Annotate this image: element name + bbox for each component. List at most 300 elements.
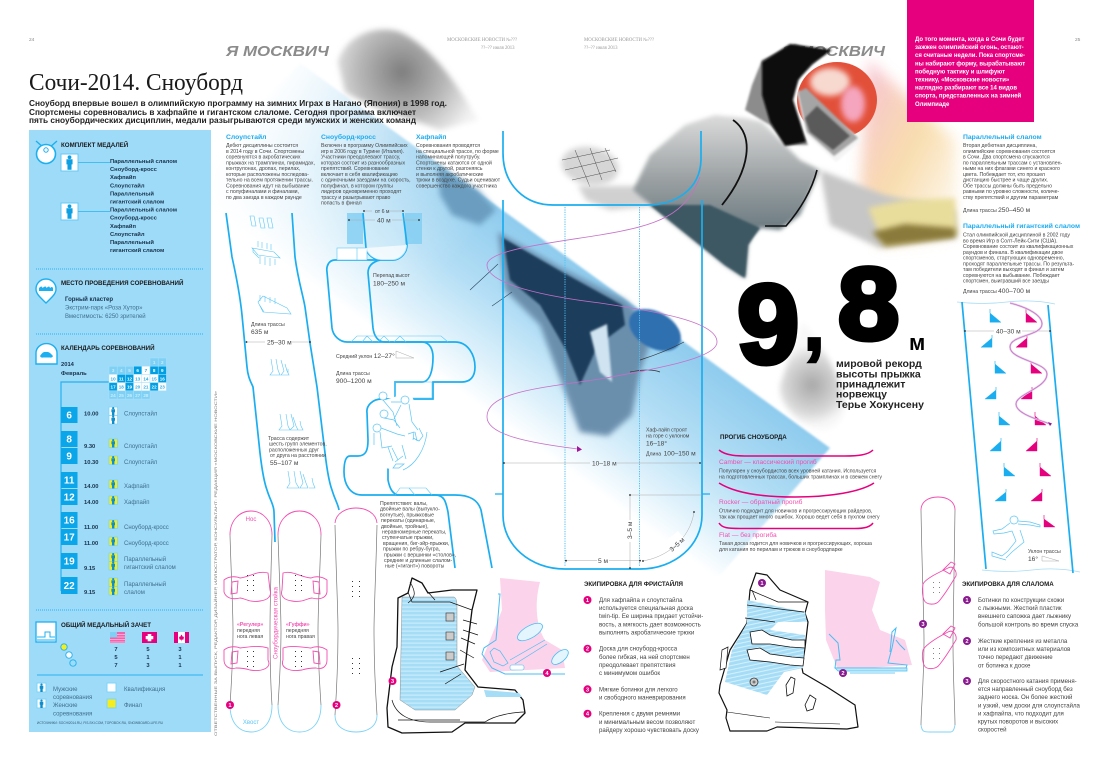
- section header right: Я МОСКВИЧ: [781, 43, 885, 60]
- medal counts: 5: [146, 647, 150, 653]
- text: halfpipe: Соревнования проводятся: [416, 143, 480, 149]
- schedule disciplines: Параллельный: [124, 581, 166, 588]
- slalom item 1: с лыжными. Жесткий пластик: [978, 605, 1062, 612]
- schedule dates: 6: [66, 410, 72, 422]
- curve: flat: [719, 523, 873, 528]
- obstacles note: средние и длинные слалом-: [384, 558, 452, 564]
- legend: Женские: [53, 703, 78, 709]
- panel: pink intro: спорта, представленных на зимней: [915, 93, 1022, 100]
- halfpipe width: 10–18 м: [592, 460, 617, 468]
- text: parallel giant slalom: там победители выходят в финал и затем: [963, 267, 1065, 273]
- course slope: Уклон трассы: [1028, 549, 1061, 555]
- panel: pink intro: ны набирают форму, вырабатывают: [915, 60, 1025, 67]
- markers: freestyle items: 2: [335, 703, 338, 709]
- slalom item 3: и хафпайпа, что подходит для: [978, 710, 1064, 717]
- text: snowboard cross: полуфинал, в котором группы: [321, 183, 393, 189]
- year and month: 2014: [61, 362, 75, 368]
- text: slopestyle: Дебют дисциплины состоится: [226, 143, 298, 149]
- item 2: более гибкая, на ней спортсмен: [599, 654, 690, 661]
- markers: slalom items: [758, 579, 927, 677]
- gate width: от 6 м: [375, 209, 390, 215]
- text: parallel giant slalom: раундов и финала. В квалификации двое: [963, 250, 1063, 256]
- obstacles note: ные («гигант») повороты: [385, 564, 445, 570]
- obstacles note: двойные валы (выпукло-: [380, 506, 440, 513]
- text: parallel giant slalom: во время Игр в Солт-Лейк-Сити (США).: [963, 237, 1058, 244]
- slalom item 1: [963, 596, 1079, 628]
- item 3: Мягкие ботинки для легкого: [599, 686, 678, 693]
- panel: pink intro: победную тактику и шлифуют: [915, 68, 1005, 75]
- medal markers: [61, 644, 76, 666]
- schedule disciplines: гигантский слалом: [124, 564, 176, 571]
- text: parallel slalom: дистанцию быстрее и чаще других.: [963, 178, 1048, 184]
- medal events list: Параллельный слалом: [110, 207, 177, 214]
- text: snowboard cross: препятствий. Соревнование: [321, 165, 389, 172]
- item 2: 2: [586, 647, 589, 653]
- panel: pink intro: технику, «Московские новости»: [915, 78, 1010, 84]
- camber text: [719, 458, 882, 480]
- slalom item 1: большой контроль во время спуска: [978, 621, 1079, 628]
- legend: Мужские: [53, 687, 78, 693]
- slalom rider: [992, 516, 1040, 560]
- panel: pink intro: До того момента, когда в Сочи будет: [915, 36, 1025, 43]
- slopestyle length: Длина трассы: [251, 322, 285, 328]
- schedule disciplines: Сноуборд-кросс: [124, 541, 169, 547]
- calendar numbers: 2: [161, 360, 164, 365]
- flag: Switzerland: [142, 632, 157, 643]
- text: snowboard cross: Участники преодолевают трассу,: [321, 154, 400, 160]
- icon: women: [61, 203, 110, 220]
- text: parallel slalom: олимпийские соревнования состоятся: [963, 148, 1055, 155]
- schedule disciplines: Параллельный: [124, 556, 166, 563]
- slopestyle note: от друга на расстоянии: [270, 453, 326, 459]
- goggles strap: [797, 90, 862, 162]
- calendar numbers: 27: [135, 393, 141, 398]
- legend: Финал: [124, 703, 143, 709]
- panel: slalom equipment: [962, 581, 1081, 734]
- chart: slalom course: [957, 301, 1080, 573]
- schedule times: 11.00: [84, 525, 98, 531]
- item 4: [584, 710, 700, 734]
- pink gates: [1016, 309, 1055, 527]
- text: slopestyle: по два заезда в каждом раунде: [226, 195, 302, 201]
- rocker text: Отлично подходит для новичков и прогрессирующих райдеров,: [719, 508, 872, 514]
- nose label: Нос: [246, 517, 256, 523]
- heading: camber: ПРОГИБ СНОУБОРДА: [720, 434, 787, 441]
- halfpipe note: Хаф-пайп строят: [646, 426, 688, 434]
- slalom item 2: от ботинка к доске: [978, 662, 1031, 669]
- text: slopestyle: тельно на всем протяжении трассы.: [226, 178, 313, 184]
- elevation drop: 180–250 м: [373, 280, 406, 288]
- medal counts: [114, 647, 182, 669]
- slalom item 1: внешнего сапожка дает лыжнику: [978, 613, 1072, 620]
- helmet: [797, 62, 877, 138]
- medal events list: Параллельный: [110, 239, 154, 246]
- section header left: Я МОСКВИЧ: [225, 43, 329, 60]
- goofy stance: передняя: [286, 628, 309, 634]
- slalom route: [1010, 303, 1052, 426]
- camber text: Популярен у сноубордистов всех уровней катания. Используется: [719, 468, 876, 474]
- markers: freestyle items: 4: [545, 671, 549, 677]
- text: snowboard cross: включает в себя квалификацию: [321, 172, 398, 178]
- obstacles note: вращения, биг-эйр-прыжки,: [383, 540, 449, 547]
- legend: соревнования: [53, 712, 92, 718]
- sources: ИСТОЧНИКИ: SOCHI2014.RU, FIS-SKI.COM, TOPOBOX.RU, SNOWBOARD-LIFE.RU: [37, 721, 164, 725]
- obstacles note: Препятствия: валы,: [380, 501, 428, 507]
- halfpipe note: 16–18°: [646, 440, 667, 448]
- schedule times: 9.30: [84, 444, 95, 450]
- torso: [633, 115, 820, 278]
- venue details: Вместимость: 6250 зрителей: [65, 313, 146, 320]
- text: parallel giant slalom: Соревнование состоит из квалификационных: [963, 244, 1074, 250]
- calendar numbers: 25: [119, 393, 124, 398]
- schedule times: 9.15: [84, 566, 96, 572]
- flat text: для катания по перилам и трюков в сноубордпарке: [719, 547, 843, 553]
- obstacles note: ступенчатые прыжки,: [382, 535, 434, 541]
- panel: pink intro: наглядно разбирают все 14 видов: [915, 85, 1017, 92]
- calendar numbers: 20: [135, 385, 141, 390]
- text: snowboard cross: Сноуборд-кросс: [321, 133, 376, 141]
- route curve: [487, 177, 717, 449]
- item 4: и минимальным весом позволяют: [599, 719, 695, 726]
- panel: pink intro: ся считаные недели. Пока спортсме-: [915, 53, 1025, 59]
- medal events list: Слоупстайл: [110, 182, 145, 189]
- goofy stance: нога правая: [286, 634, 315, 640]
- icon: medal: [36, 141, 57, 164]
- text: slopestyle: Соревнования идут на выбывание: [226, 183, 310, 189]
- leg: [498, 232, 655, 436]
- panel: pink intro: зажжен олимпийский огонь, остают-: [915, 44, 1024, 51]
- calendar numbers: 6: [136, 368, 139, 373]
- text: halfpipe: на специальной трассе, по форме: [416, 148, 499, 155]
- calendar numbers: 24: [111, 393, 116, 398]
- rocker text: так как прощает много ошибок. Хорошо ведет себя в пухлом снегу: [719, 514, 880, 520]
- item 1: 1: [586, 598, 590, 604]
- binding: slalom: [825, 570, 912, 673]
- slalom item 3: Для скоростного катания применя-: [978, 678, 1077, 685]
- binding dots: [247, 575, 360, 674]
- boot: soft freestyle: [387, 578, 525, 733]
- schedule dates: [64, 410, 75, 592]
- schedule disciplines: Хафпайп: [124, 483, 149, 490]
- record caption: норвежцу: [836, 388, 887, 400]
- tail label: Хвост: [243, 720, 259, 726]
- slalom item 2: Жесткие крепления из металла: [978, 638, 1068, 645]
- medal events list: Хафпайп: [110, 174, 136, 181]
- slopestyle width: [246, 340, 311, 346]
- markers: slalom items: 1: [760, 581, 764, 587]
- big number: 8: [838, 248, 899, 361]
- chart: snowboard cross course: [327, 209, 492, 570]
- slopestyle note: 55–107 м: [270, 460, 299, 467]
- heading: calendar: КАЛЕНДАРЬ СОРЕВНОВАНИЙ: [61, 344, 155, 352]
- calendar numbers: 11: [119, 376, 124, 381]
- item 1: Для хафпайпа и слоупстайла: [599, 597, 683, 604]
- calendar numbers: 15: [152, 376, 157, 381]
- flat text: [719, 531, 872, 553]
- record caption: высоты прыжка: [836, 368, 921, 380]
- calendar numbers: 14: [143, 376, 149, 381]
- calendar numbers: 22: [152, 385, 157, 390]
- rocker text: Rocker — обратный прогиб: [719, 498, 803, 506]
- text: snowboard cross: лидеров одновременно проходят: [321, 189, 402, 195]
- obstacles note: двойные, тройные),: [381, 523, 429, 530]
- text: halfpipe: напоминающей полутрубу.: [416, 154, 480, 160]
- text: slopestyle: которые расположены последова-: [226, 172, 309, 178]
- illustration: snowboarder watercolor: [140, 10, 958, 610]
- flat text: Flat — без прогиба: [719, 531, 777, 539]
- regular stance: нога левая: [237, 634, 263, 640]
- slalom item 1: Ботинки по конструкции схожи: [978, 597, 1064, 604]
- item 1: вость, а мягкость дает возможность: [599, 621, 701, 628]
- subtitle: [29, 98, 447, 125]
- schedule dates: 19: [64, 556, 75, 568]
- text: parallel slalom: в Сочи. Два спортсмена спускаются: [963, 154, 1050, 160]
- schedule dates: 9: [66, 452, 72, 462]
- panel: freestyle equipment: [584, 580, 703, 734]
- text: parallel slalom: ными на них флагами синего и красного: [963, 166, 1060, 172]
- curve: camber: [719, 450, 873, 456]
- text: parallel slalom: по параллельным трассам с установлен-: [963, 160, 1062, 166]
- text: parallel giant slalom: [963, 222, 1080, 295]
- markers: freestyle items: 1: [228, 703, 232, 709]
- flat text: Такая доска годится для новичков и прогрессирующих, хороша: [719, 541, 872, 547]
- panel: pink intro: [907, 0, 1034, 122]
- legend: Квалификация: [124, 687, 165, 693]
- schedule disciplines: Хафпайп: [124, 499, 149, 506]
- text: parallel slalom: ству препятствий и другим параметрам: [963, 194, 1059, 201]
- slalom item 3: заднего носка. Он более жесткий: [978, 694, 1072, 701]
- obstacles note: вогнутые), прыжковые: [380, 512, 434, 518]
- text: parallel giant slalom: Параллельный гигантский слалом: [963, 222, 1080, 230]
- medal counts: 3: [146, 663, 150, 669]
- item 3: [584, 685, 686, 701]
- schedule times: 14.00: [84, 500, 99, 506]
- schedule disciplines: Сноуборд-кросс: [124, 525, 169, 531]
- text: parallel slalom: Вторая дебютная дисциплина,: [963, 143, 1037, 149]
- masthead right: МОСКОВСКИЕ НОВОСТИ №???: [584, 37, 654, 43]
- calendar numbers: 7: [145, 368, 148, 373]
- bowl fill: [366, 245, 407, 260]
- medal counts: 7: [114, 647, 118, 653]
- text: slopestyle: прыжках на трамплинах, пирамидах,: [226, 160, 315, 166]
- flat bottom width: [565, 558, 641, 565]
- slalom item 1: 1: [965, 598, 969, 604]
- schedule person glyphs: [111, 407, 115, 595]
- text: slopestyle: [226, 133, 315, 201]
- schedule times: 10.30: [84, 460, 99, 466]
- heading: standings: ОБЩИЙ МЕДАЛЬНЫЙ ЗАЧЕТ: [61, 621, 151, 629]
- course slope: 16°: [1028, 555, 1038, 563]
- heading: venue: МЕСТО ПРОВЕДЕНИЯ СОРЕВНОВАНИЙ: [61, 279, 184, 287]
- wall height: 3–5 м: [669, 536, 687, 553]
- text: parallel slalom: Параллельный слалом: [963, 133, 1042, 141]
- slalom item 3: 3: [965, 679, 969, 685]
- calendar numbers: 17: [111, 385, 116, 390]
- medal events list: Сноуборд-кросс: [110, 215, 158, 222]
- rails and kickers: [250, 216, 315, 488]
- text: parallel giant slalom: Стал олимпийской дисциплиной в 2002 году: [963, 232, 1070, 238]
- regular stance: передняя: [237, 628, 260, 634]
- text: snowboard cross: игр в 2006 году в Турине (Италия).: [321, 149, 404, 155]
- item 1: выполнять акробатические трюки: [599, 629, 694, 636]
- blue gates: [981, 309, 1015, 501]
- legend: соревнования: [53, 695, 92, 701]
- panel: board camber: [719, 434, 882, 553]
- text: slopestyle: соревнуются в акробатических: [226, 154, 301, 160]
- markers: freestyle items: 3: [391, 679, 395, 685]
- schedule day boxes: [61, 407, 78, 594]
- course width: 40–30 м: [996, 328, 1021, 335]
- item 1: [584, 596, 703, 636]
- page number left: 24: [29, 37, 35, 43]
- medal events list: Сноуборд-кросс: [110, 166, 158, 173]
- vertical credits: ОТВЕТСТВЕННЫЕ ЗА ВЫПУСК, РЕДАКТОР, ДИЗАЙНЕР, ИЛЛЮСТРАТОР, КОНСУЛЬТАНТ: РЕДАКЦИЯ «МОСКОВСКИЕ НОВОСТИ»: [214, 391, 218, 736]
- slalom item 2: или из композитных материалов: [978, 646, 1070, 653]
- snowboard nose: [338, 30, 478, 130]
- text: slopestyle: Слоупстайл: [226, 133, 266, 141]
- masthead right: ??–?? июля 2013: [584, 46, 618, 51]
- text: halfpipe: и выполняя акробатические: [416, 172, 484, 178]
- timeline line: [61, 382, 109, 591]
- text: halfpipe: стенки к другой, разгоняясь: [416, 165, 483, 172]
- cross length: 900–1200 м: [336, 378, 372, 385]
- elevation drop: Перепад высот: [373, 273, 410, 279]
- item 2: с минимумом ошибок: [599, 670, 660, 677]
- schedule disciplines: слалом: [124, 590, 145, 596]
- icon: medal standings: [36, 622, 56, 642]
- flag: Canada: [174, 632, 189, 643]
- obstacles note: прыжки по ребру-бугра,: [383, 547, 440, 553]
- binding: freestyle: [482, 578, 571, 674]
- slalom item 3: ется направленный сноуборд без: [978, 686, 1073, 693]
- big number: ,: [803, 278, 825, 367]
- item 1: twin-tip. Ее ширина придает устойчи-: [599, 613, 703, 620]
- text: snowboard cross: которая состоит из разнообразных: [321, 160, 405, 166]
- text: halfpipe: Хафпайп: [416, 133, 446, 141]
- snowboarders group: [372, 392, 428, 472]
- flat bottom width: 5 м: [598, 558, 608, 565]
- boards: regular, goofy, cross: [224, 508, 377, 732]
- schedule times: 11.00: [84, 541, 98, 547]
- item 3: 3: [586, 687, 590, 693]
- calendar numbers: 8: [153, 368, 156, 373]
- text: snowboard cross: [321, 133, 411, 206]
- medal events list: Параллельный слалом: [110, 158, 177, 165]
- average slope: Средний уклон 12–27°: [336, 352, 395, 360]
- schedule disciplines: [124, 410, 176, 596]
- text: snowboard cross: попасть в финал: [321, 200, 362, 206]
- heading: slalom equipment: ЭКИПИРОВКА ДЛЯ СЛАЛОМА: [962, 581, 1054, 588]
- camber text: на подготовленных трассах, больших трамплинах и в свежем снегу: [719, 474, 882, 480]
- medal events list: гигантский слалом: [110, 247, 164, 254]
- item 1: используется специальная доска: [599, 605, 694, 612]
- calendar numbers: 19: [127, 385, 132, 390]
- item 4: 4: [586, 712, 590, 718]
- schedule gender markers: [109, 407, 118, 595]
- text: parallel giant slalom: соревнуются на выбывание. Побеждает: [963, 273, 1060, 279]
- cross length: Длина трассы: [336, 371, 370, 377]
- calendar numbers: 18: [119, 385, 124, 390]
- text: parallel slalom: Обе трассы должны быть предельно: [963, 183, 1052, 189]
- boot of rider: [622, 300, 688, 360]
- text: halfpipe: [416, 133, 501, 189]
- schedule times: 14.00: [84, 484, 99, 490]
- gate width: [348, 209, 420, 224]
- feathered sleeve: [438, 166, 496, 225]
- gate width: 40 м: [377, 218, 391, 224]
- text: parallel giant slalom: спортсменов, стартующих одновременно,: [963, 256, 1064, 262]
- markers: freestyle items: [226, 669, 551, 709]
- slopestyle note: Трасса содержит: [268, 436, 310, 442]
- slopestyle length: 635 м: [251, 329, 269, 336]
- flag: USA: [110, 632, 125, 643]
- text: snowboard cross: трассу и разыгрывают право: [321, 195, 390, 201]
- year and month: Февраль: [61, 371, 87, 377]
- medal events list: гигантский слалом: [110, 198, 164, 206]
- calendar numbers: 12: [127, 376, 132, 381]
- medal events list: Слоупстайл: [110, 231, 145, 238]
- text: slopestyle: контрулонах, дропах, перилах,: [226, 166, 300, 172]
- panel: pink intro: Олимпиаде: [915, 102, 950, 108]
- calendar grid: [109, 358, 166, 399]
- slalom item 2: точно передают движение: [978, 654, 1053, 661]
- schedule disciplines: Слоупстайл: [124, 443, 158, 450]
- rocker text: [719, 498, 880, 520]
- icon: calendar: [36, 344, 57, 364]
- regular stance: «Регулер»: [237, 622, 263, 628]
- slalom item 3: крутых поворотов и высоких: [978, 718, 1058, 726]
- text: halfpipe: совершенство каждого участника: [416, 183, 497, 189]
- calendar numbers: 23: [160, 385, 165, 390]
- item 4: райдеру хорошо чувствовать доску: [599, 727, 700, 734]
- slalom item 3: [963, 677, 1081, 734]
- calendar numbers: 28: [143, 393, 149, 398]
- calendar numbers: 13: [135, 376, 141, 381]
- item 2: преодолевает препятствия: [599, 662, 676, 669]
- text: parallel slalom: равными по уровню сложности, количе-: [963, 189, 1060, 195]
- page number right: 25: [1075, 37, 1081, 43]
- schedule dates: 8: [66, 434, 72, 446]
- wall height: [627, 494, 702, 569]
- panel: left sidebar: [29, 130, 211, 732]
- medal counts: 3: [178, 647, 182, 653]
- text: halfpipe: Спортсмены катаются от одной: [416, 159, 492, 166]
- text: snowboard cross: Включен в программу Олимпийских: [321, 142, 408, 149]
- text: parallel slalom: Длина трассы 250–450 м: [963, 207, 1031, 214]
- yellow foot glow: [860, 60, 958, 245]
- masthead left: МОСКОВСКИЕ НОВОСТИ №???: [447, 37, 517, 43]
- big number: [737, 248, 925, 387]
- boot: hard slalom: [719, 573, 858, 731]
- slalom item 3: и узкий, чем доски для слоупстайла: [978, 702, 1081, 709]
- calendar numbers: 21: [143, 385, 149, 390]
- medal counts: 1: [178, 663, 182, 669]
- calendar numbers: 3: [112, 368, 115, 373]
- medal counts: 1: [146, 655, 150, 661]
- slopestyle note: расположенных друг: [269, 447, 319, 453]
- average slope: [336, 351, 414, 360]
- medal counts: 7: [114, 663, 118, 669]
- text: parallel giant slalom: Длина трассы 400–700 м: [963, 288, 1031, 295]
- medal events list: Хафпайп: [110, 223, 136, 230]
- icon: venue pin: [36, 279, 56, 303]
- calendar numbers: 16: [160, 376, 165, 381]
- chart: slopestyle course: [226, 213, 339, 542]
- calendar numbers: 10: [111, 376, 116, 381]
- calendar numbers: 5: [128, 368, 131, 373]
- blue watercolor band: [170, 63, 830, 610]
- item 4: Крепления с двумя ремнями: [599, 711, 680, 718]
